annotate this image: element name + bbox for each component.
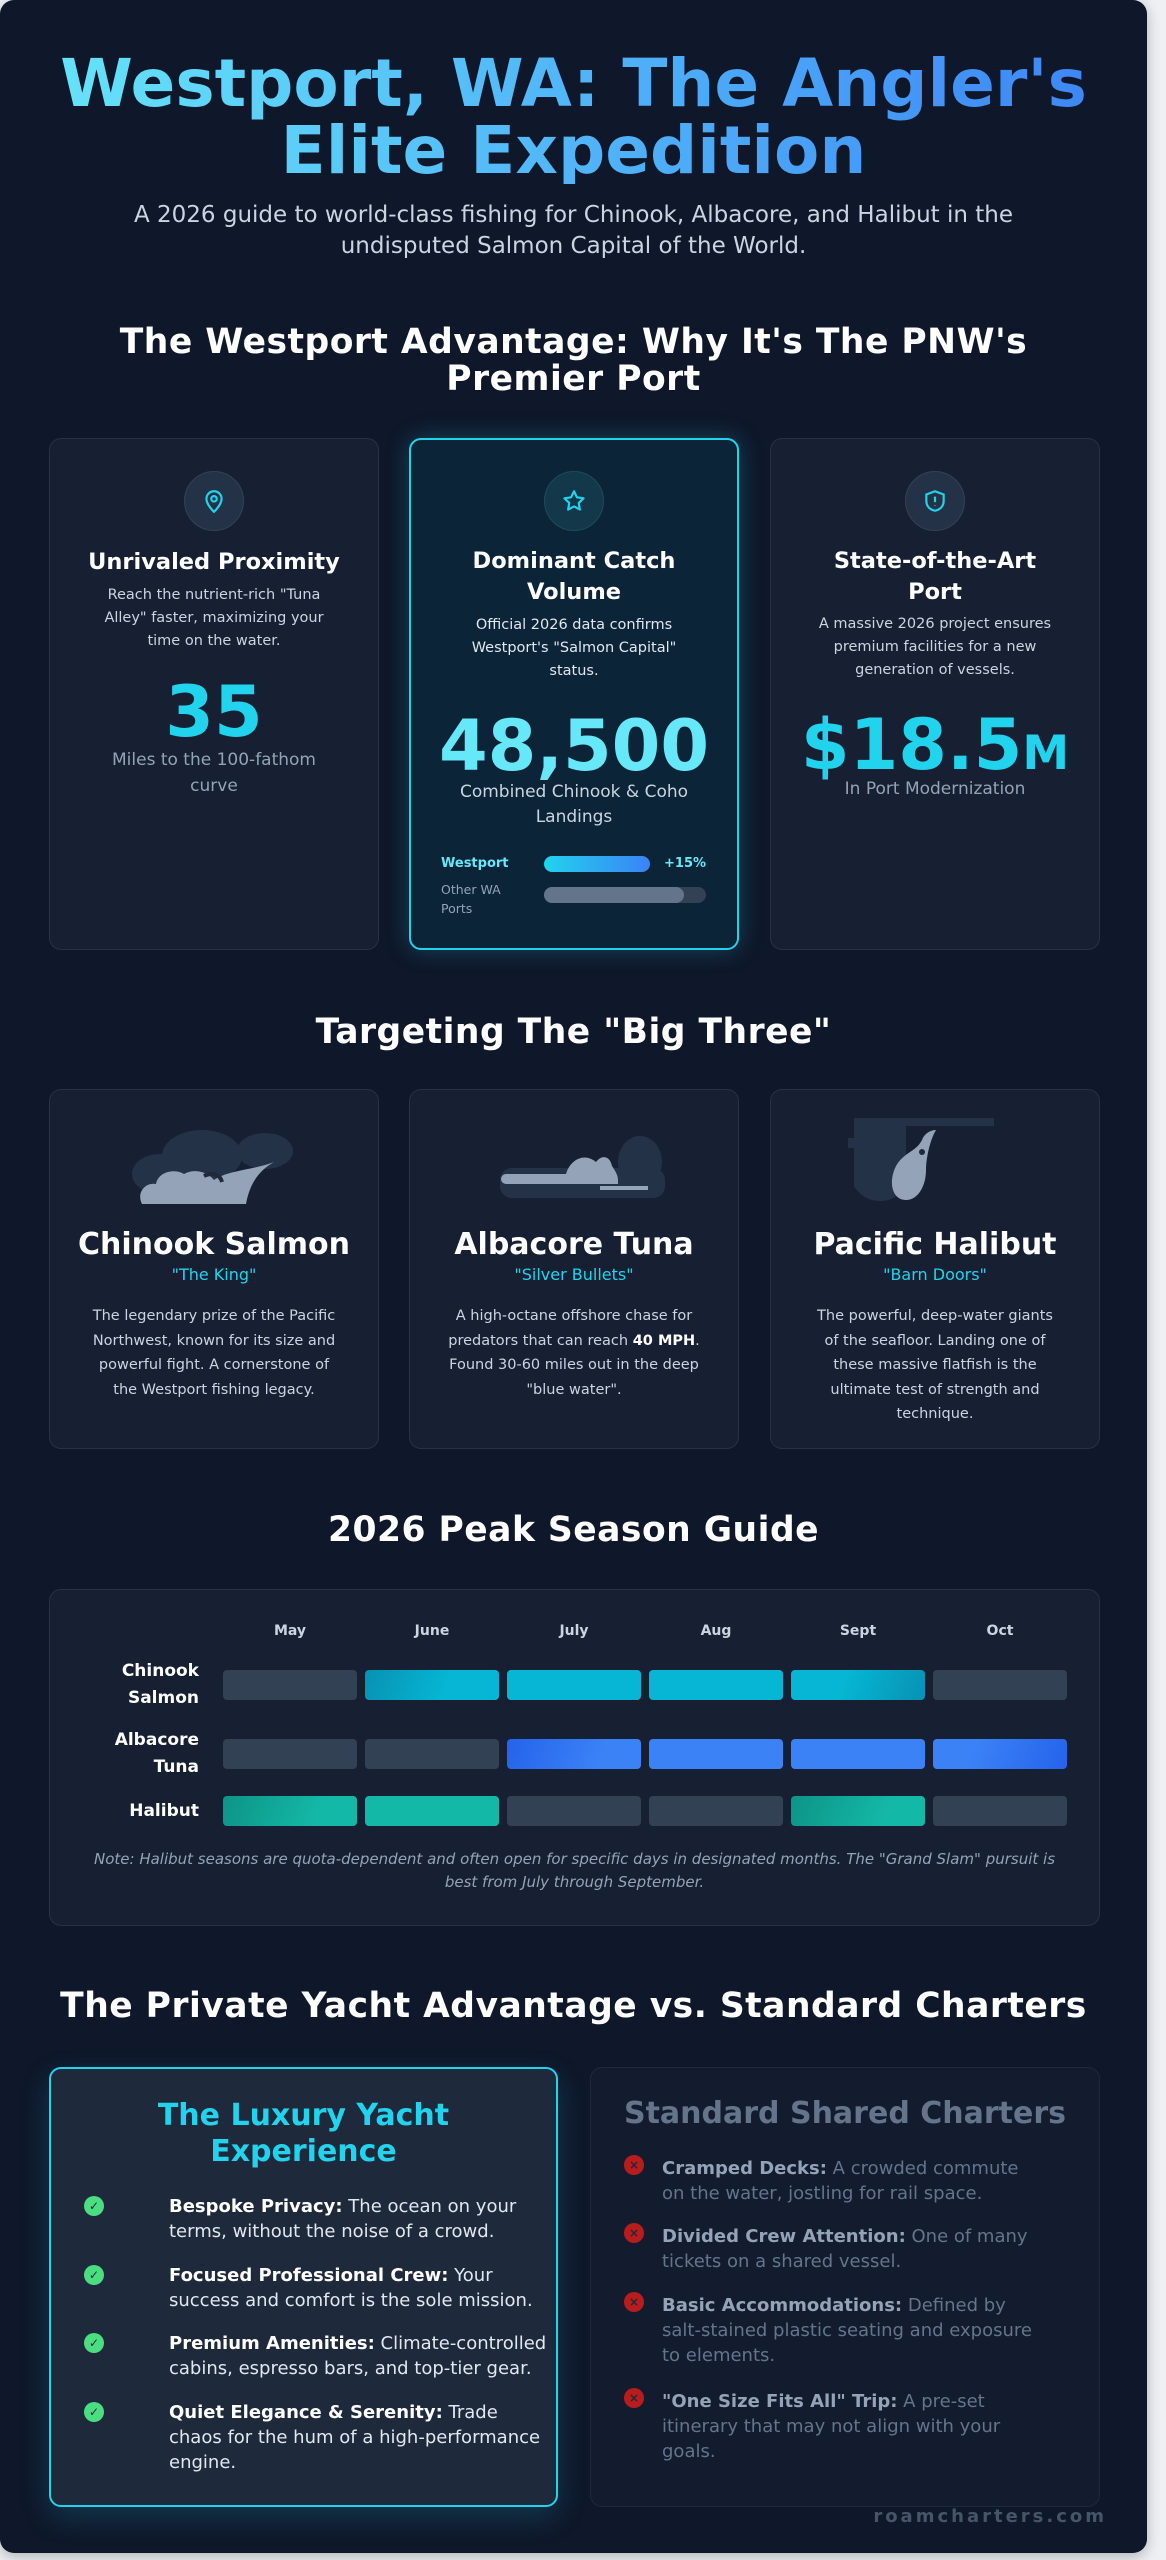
- heading: westport advantage: The Westport Advantage: Why It's The PNW's: [120, 322, 1027, 362]
- title: [0, 50, 1147, 184]
- panel: state-of-the-art port: [770, 438, 1100, 950]
- card description: Reach the nutrient-rich "Tuna: [108, 587, 320, 603]
- description: [816, 1308, 1053, 1422]
- item list: on the water, jostling for rail space.: [662, 2183, 982, 2204]
- description: Found 30-60 miles out in the deep: [449, 1357, 699, 1373]
- description: A high-octane offshore chase for: [456, 1308, 692, 1324]
- item list: ✓: [89, 2199, 99, 2213]
- item list: to elements.: [662, 2345, 775, 2366]
- row: albacore tuna: [114, 1730, 1067, 1777]
- description: [448, 1308, 700, 1398]
- description: The legendary prize of the Pacific: [93, 1308, 335, 1324]
- description: "blue water".: [526, 1382, 622, 1398]
- stat label: Landings: [536, 807, 612, 827]
- card title: Unrivaled Proximity: [88, 549, 340, 575]
- heading: season guide: 2026 Peak Season Guide: [328, 1510, 819, 1550]
- species name: Pacific Halibut: [813, 1227, 1057, 1262]
- subtitle: [134, 202, 1013, 259]
- panel: dominant catch volume: [409, 438, 739, 950]
- row: chinook salmon: [122, 1661, 1067, 1708]
- item list: ✓: [89, 2336, 99, 2350]
- description: of the seafloor. Landing one of: [824, 1332, 1046, 1348]
- description: [92, 1308, 335, 1398]
- item list: Focused Professional Crew: Your: [169, 2265, 493, 2286]
- card title: [834, 548, 1036, 605]
- bar comparison: Ports: [441, 901, 472, 916]
- icon: salmon: [132, 1130, 293, 1204]
- bar comparison: [441, 856, 706, 916]
- row: halibut: [129, 1796, 1067, 1826]
- description: The powerful, deep-water giants: [817, 1308, 1053, 1324]
- item list: cabins, espresso bars, and top-tier gear.: [169, 2358, 532, 2379]
- description: the Westport fishing legacy.: [113, 1382, 315, 1398]
- stat: $18.5M: $18.5M: [801, 704, 1069, 786]
- card description: status.: [549, 663, 599, 679]
- species name: Chinook Salmon: [78, 1227, 350, 1262]
- card description: generation of vessels.: [855, 662, 1015, 678]
- item list: [624, 2155, 1032, 2462]
- card description: premium facilities for a new: [834, 639, 1036, 655]
- item list: engine.: [169, 2452, 236, 2473]
- panel: season chart: [49, 1589, 1100, 1926]
- card title: [473, 548, 675, 605]
- stat label: [112, 750, 316, 796]
- card title: Dominant Catch: [473, 548, 675, 574]
- heading: westport advantage: Premier Port: [446, 359, 701, 399]
- month headers: June: [415, 1623, 449, 1639]
- month headers: July: [559, 1623, 589, 1639]
- stat label: [460, 782, 688, 827]
- item list: [84, 2196, 546, 2473]
- bar comparison: Other WA: [441, 882, 501, 897]
- card description: Alley" faster, maximizing your: [104, 610, 324, 626]
- stat label: In Port Modernization: [845, 779, 1025, 799]
- item list: Quiet Elegance & Serenity: Trade: [169, 2402, 498, 2423]
- item list: success and comfort is the sole mission.: [169, 2290, 533, 2311]
- item list: ×: [629, 2391, 639, 2405]
- row: chinook salmon: Salmon: [128, 1688, 199, 1708]
- bar comparison: +15%: [664, 856, 706, 871]
- panel: unrivaled proximity: [49, 438, 379, 950]
- card title: Volume: [527, 579, 621, 605]
- item list: ✓: [89, 2405, 99, 2419]
- item list: ×: [629, 2295, 639, 2309]
- panel: standard charters: [590, 2067, 1100, 2507]
- card title: Port: [908, 579, 962, 605]
- item list: ✓: [89, 2268, 99, 2282]
- stat label: curve: [190, 776, 238, 796]
- description: predators that can reach 40 MPH.: [448, 1332, 700, 1348]
- month headers: Sept: [840, 1623, 876, 1639]
- bar comparison: Westport: [441, 856, 509, 871]
- title: Elite Expedition: [281, 112, 866, 189]
- subtitle: A 2026 guide to world-class fishing for Chinook, Albacore, and Halibut in the: [134, 202, 1013, 228]
- icon: halibut: [848, 1118, 994, 1201]
- card description: Westport's "Salmon Capital": [472, 640, 676, 656]
- note: best from July through September.: [445, 1873, 704, 1891]
- card description: Official 2026 data confirms: [476, 617, 672, 633]
- icon: shield: [905, 471, 965, 531]
- item list: itinerary that may not align with your: [662, 2416, 1000, 2437]
- month headers: May: [274, 1623, 306, 1639]
- card description: [819, 616, 1051, 678]
- stat: 35: 35: [165, 671, 263, 753]
- month headers: Oct: [987, 1623, 1013, 1639]
- card description: [104, 587, 324, 649]
- panel title: [158, 2098, 449, 2169]
- footer brand: roamcharters.com: [873, 2506, 1107, 2527]
- heading: big three: Targeting The "Big Three": [316, 1012, 831, 1052]
- description: these massive flatfish is the: [833, 1357, 1037, 1373]
- item list: Cramped Decks: A crowded commute: [662, 2158, 1018, 2179]
- item list: salt-stained plastic seating and exposure: [662, 2320, 1032, 2341]
- row: albacore tuna: Tuna: [154, 1757, 199, 1777]
- description: powerful fight. A cornerstone of: [99, 1357, 329, 1373]
- subtitle: undisputed Salmon Capital of the World.: [341, 233, 806, 259]
- nickname: "Barn Doors": [883, 1265, 987, 1284]
- description: Northwest, known for its size and: [93, 1332, 335, 1348]
- item list: chaos for the hum of a high-performance: [169, 2427, 540, 2448]
- note: Note: Halibut seasons are quota-dependent and often open for specific days in designated months. The "Grand Slam" pursuit is: [94, 1850, 1055, 1868]
- panel: albacore tuna: [409, 1089, 739, 1449]
- item list: goals.: [662, 2441, 716, 2462]
- item list: ×: [629, 2226, 639, 2240]
- item list: Premium Amenities: Climate-controlled: [169, 2333, 546, 2354]
- row: chinook salmon: Chinook: [122, 1661, 199, 1681]
- title: Westport, WA: The Angler's: [60, 45, 1087, 122]
- panel: chinook salmon: [49, 1089, 379, 1449]
- icon: tuna: [500, 1136, 665, 1198]
- item list: ×: [629, 2158, 639, 2172]
- item list: Bespoke Privacy: The ocean on your: [169, 2196, 516, 2217]
- item list: Divided Crew Attention: One of many: [662, 2226, 1028, 2247]
- stat: 48,500: 48,500: [439, 705, 709, 787]
- item list: Basic Accommodations: Defined by: [662, 2295, 1006, 2316]
- card title: State-of-the-Art: [834, 548, 1036, 574]
- panel title: Standard Shared Charters: [624, 2096, 1066, 2131]
- description: ultimate test of strength and: [830, 1382, 1040, 1398]
- month headers: Aug: [701, 1623, 731, 1639]
- panel title: The Luxury Yacht: [158, 2098, 449, 2133]
- stat label: Combined Chinook & Coho: [460, 782, 688, 802]
- note: [94, 1850, 1055, 1891]
- card description: A massive 2026 project ensures: [819, 616, 1051, 632]
- item list: terms, without the noise of a crowd.: [169, 2221, 494, 2242]
- month headers: [274, 1623, 1014, 1639]
- row: halibut: Halibut: [129, 1801, 199, 1821]
- nickname: "Silver Bullets": [514, 1265, 634, 1284]
- panel: luxury yacht: [49, 2067, 558, 2507]
- description: technique.: [897, 1406, 973, 1422]
- panel: pacific halibut: [770, 1089, 1100, 1449]
- nickname: "The King": [172, 1265, 256, 1284]
- row: albacore tuna: Albacore: [115, 1730, 199, 1750]
- species name: Albacore Tuna: [454, 1227, 694, 1262]
- heading: yacht vs charters: The Private Yacht Advantage vs. Standard Charters: [60, 1986, 1087, 2026]
- icon: star: [544, 471, 604, 531]
- heading: westport advantage: [120, 322, 1027, 399]
- icon: location pin: [184, 471, 244, 531]
- panel title: Experience: [210, 2134, 397, 2169]
- stat label: Miles to the 100-fathom: [112, 750, 316, 770]
- card description: [472, 617, 676, 679]
- item list: tickets on a shared vessel.: [662, 2251, 901, 2272]
- item list: "One Size Fits All" Trip: A pre-set: [662, 2391, 985, 2412]
- card description: time on the water.: [147, 633, 281, 649]
